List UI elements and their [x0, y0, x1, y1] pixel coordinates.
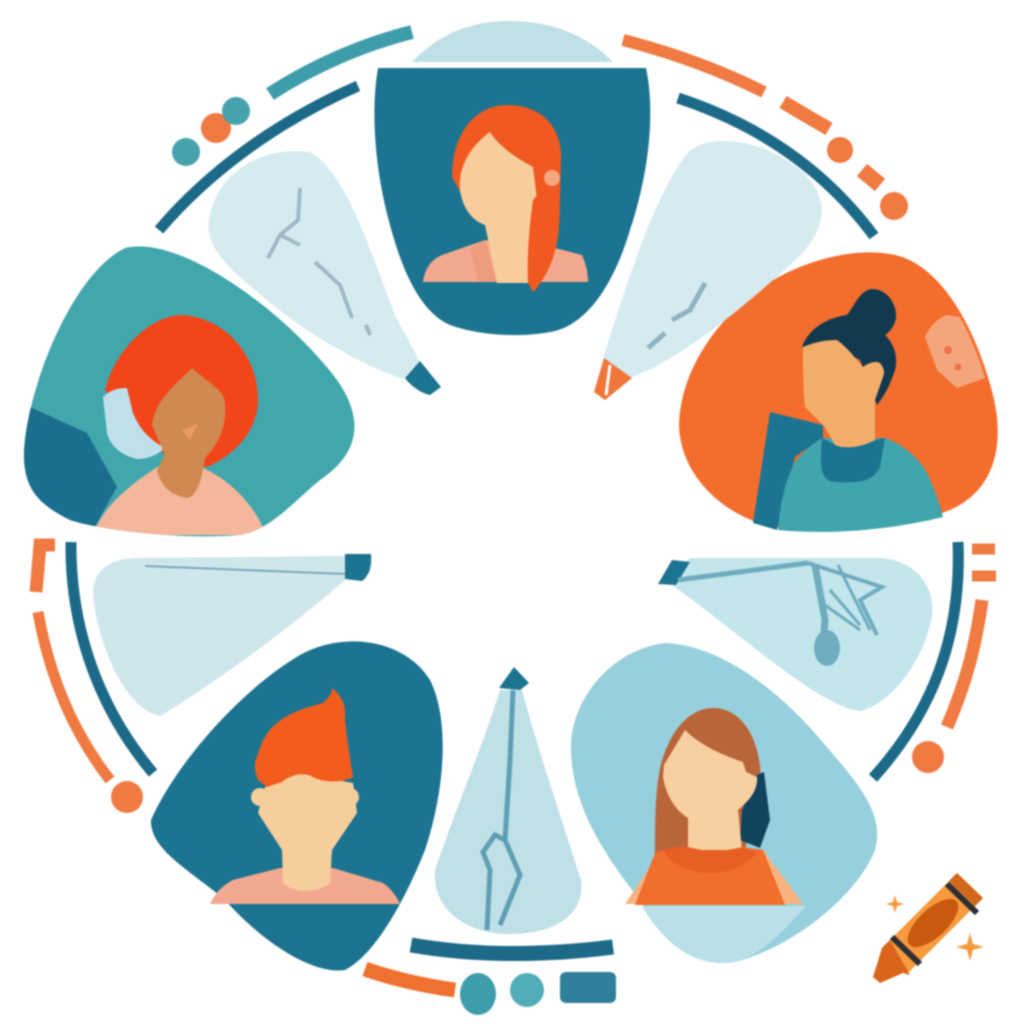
dots: decorative circles on the ring: [111, 97, 944, 1015]
panel: upper right portrait: [679, 252, 998, 532]
panel: lower left portrait: [151, 641, 443, 971]
panel: upper left wedge: [208, 151, 441, 395]
panel: left portrait: [20, 246, 354, 536]
panel: upper right wedge: [594, 141, 822, 400]
panel: lower right portrait: [571, 643, 877, 963]
panel: right wedge: [658, 558, 932, 711]
panel: bottom wedge: [435, 667, 581, 934]
logo: crayon with sparkles: [873, 873, 984, 983]
panel: top portrait: [374, 21, 650, 335]
arcs: dark blue ring: [71, 86, 958, 954]
panel: left wedge: [93, 554, 371, 716]
